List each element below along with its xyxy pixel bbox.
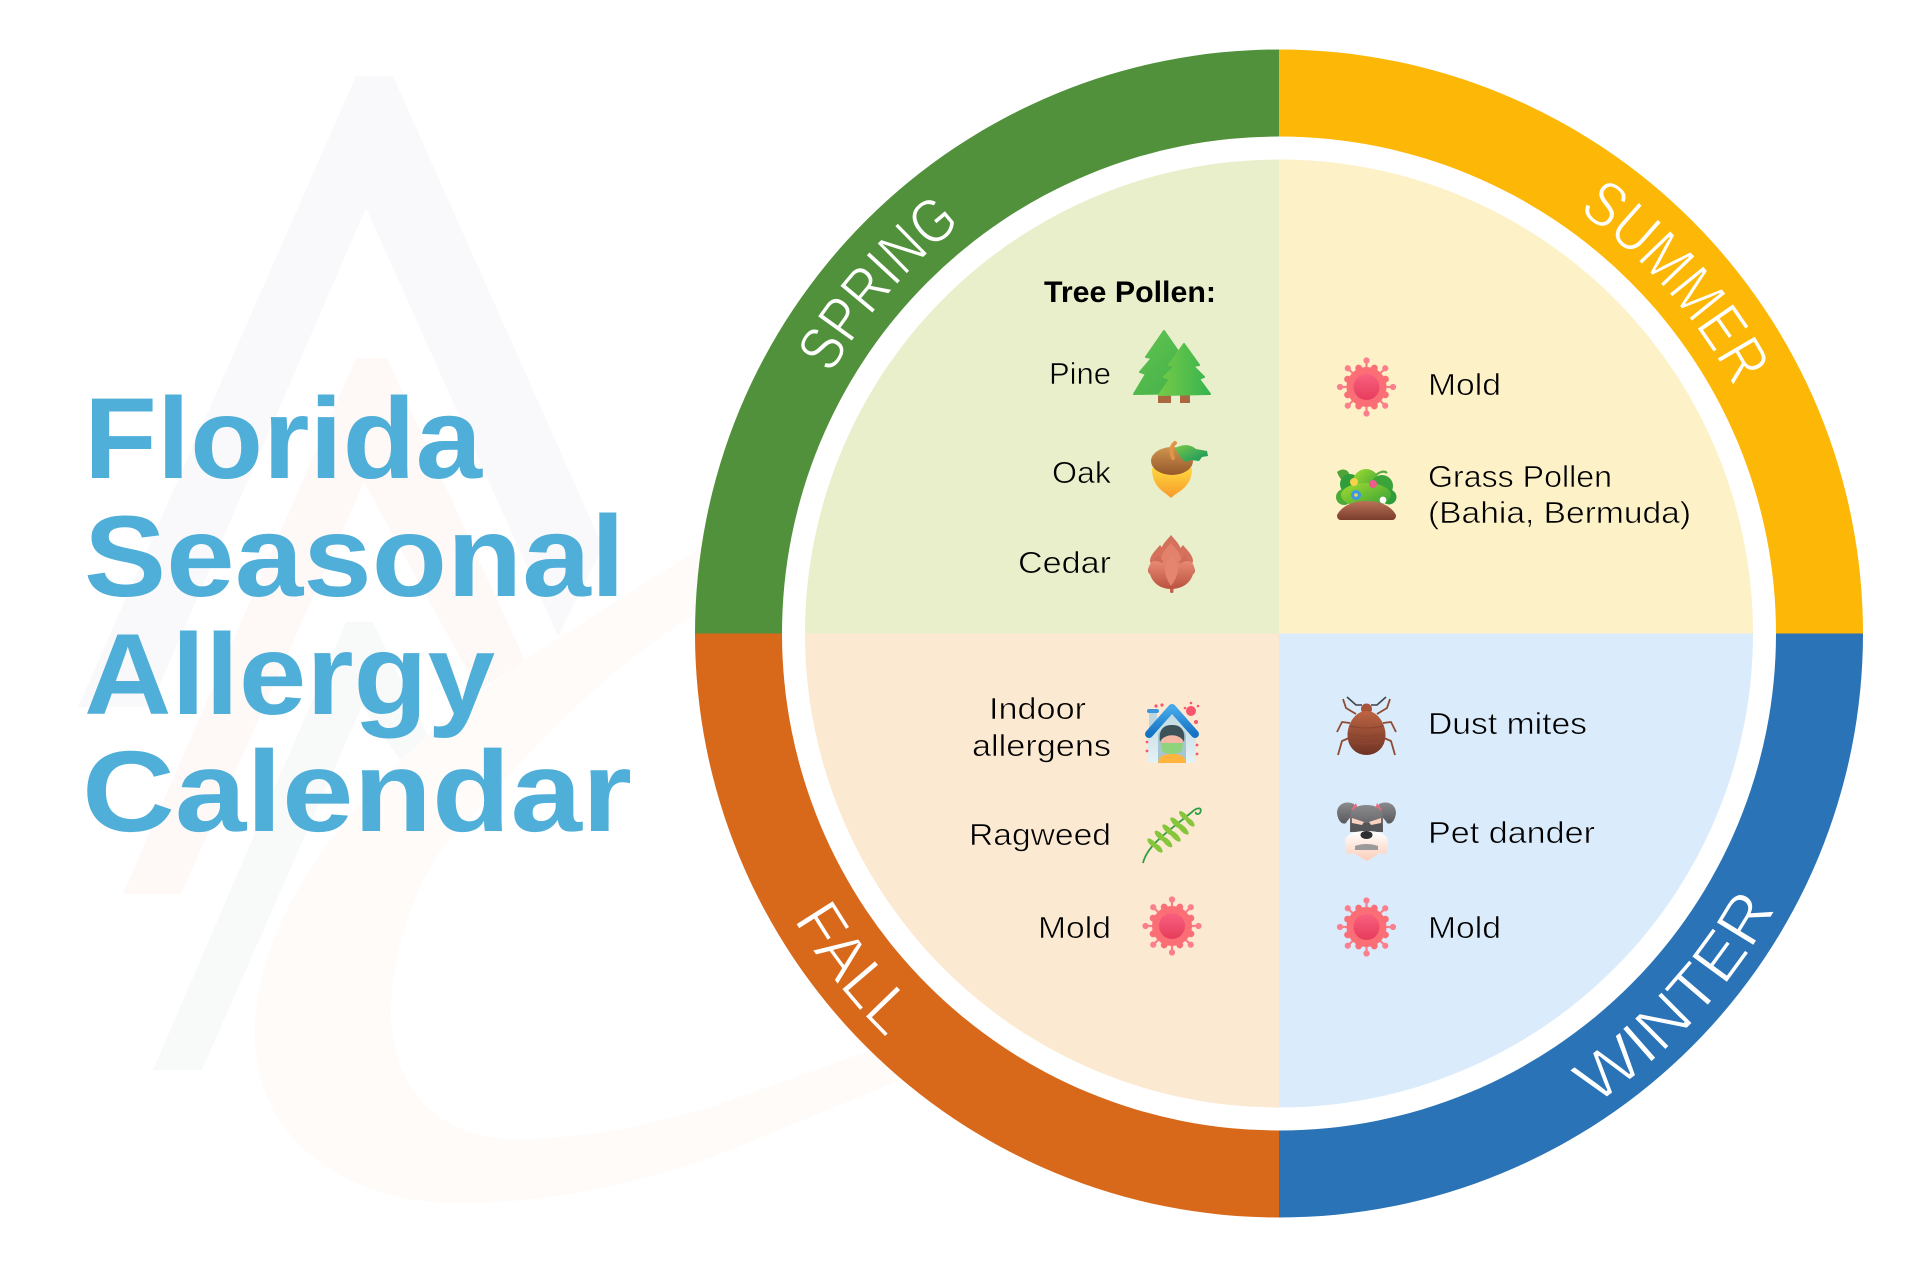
icon: grass with flowers xyxy=(1336,469,1396,520)
label: grass pollen: Grass Pollen xyxy=(1428,459,1612,494)
title: Allergy xyxy=(84,611,495,739)
icon: dust mite xyxy=(1337,697,1396,755)
spring quadrant background xyxy=(805,160,1279,634)
icon: pine trees xyxy=(1134,331,1210,403)
label: mold: Mold xyxy=(1038,910,1111,945)
title: Florida xyxy=(84,375,483,503)
panel: fall xyxy=(695,634,1279,1218)
winter label: WINTER xyxy=(1570,895,1774,1096)
title xyxy=(82,375,632,856)
icon: mold xyxy=(1337,357,1396,417)
backing disc of the calendar wheel xyxy=(695,50,1863,1218)
icon: schnauzer dog xyxy=(1337,802,1396,861)
icon: acorn xyxy=(1151,443,1208,498)
winter ring segment xyxy=(1279,634,1863,1218)
label: grass pollen: (Bahia, Bermuda) xyxy=(1428,495,1691,530)
label: cedar: Cedar xyxy=(1018,545,1111,580)
label: indoor allergens: allergens xyxy=(972,728,1111,763)
icon: mold xyxy=(1142,896,1202,956)
summer quadrant background xyxy=(1279,160,1753,634)
label: ragweed: Ragweed xyxy=(969,817,1111,852)
icon: house with masked person xyxy=(1146,702,1199,763)
label: mold: Mold xyxy=(1428,910,1501,945)
spring ring segment xyxy=(695,50,1279,634)
title: Calendar xyxy=(82,728,632,856)
panel: spring xyxy=(695,50,1279,634)
spring label: SPRING xyxy=(801,200,954,368)
fall ring segment xyxy=(695,634,1279,1218)
heading: tree pollen: Tree Pollen: xyxy=(1044,276,1216,309)
title: Seasonal xyxy=(84,493,625,621)
summer ring segment xyxy=(1279,50,1863,634)
winter quadrant background xyxy=(1279,634,1753,1108)
label: dust mites: Dust mites xyxy=(1428,706,1587,741)
label: indoor allergens: Indoor xyxy=(989,691,1086,726)
icon: ragweed fern xyxy=(1143,808,1201,863)
label: pet dander: Pet dander xyxy=(1428,815,1595,850)
icon: mold xyxy=(1337,897,1396,957)
summer label: SUMMER xyxy=(1585,183,1766,384)
fall label: FALL xyxy=(796,901,900,1036)
icon: cedar cone xyxy=(1148,535,1195,593)
panel: winter xyxy=(1279,634,1863,1218)
background: faint watermark logo xyxy=(78,76,900,1203)
label: mold: Mold xyxy=(1428,367,1501,402)
panel: summer xyxy=(1279,50,1863,634)
label: pine: Pine xyxy=(1049,356,1111,391)
label: oak: Oak xyxy=(1052,455,1112,490)
fall quadrant background xyxy=(805,634,1279,1108)
